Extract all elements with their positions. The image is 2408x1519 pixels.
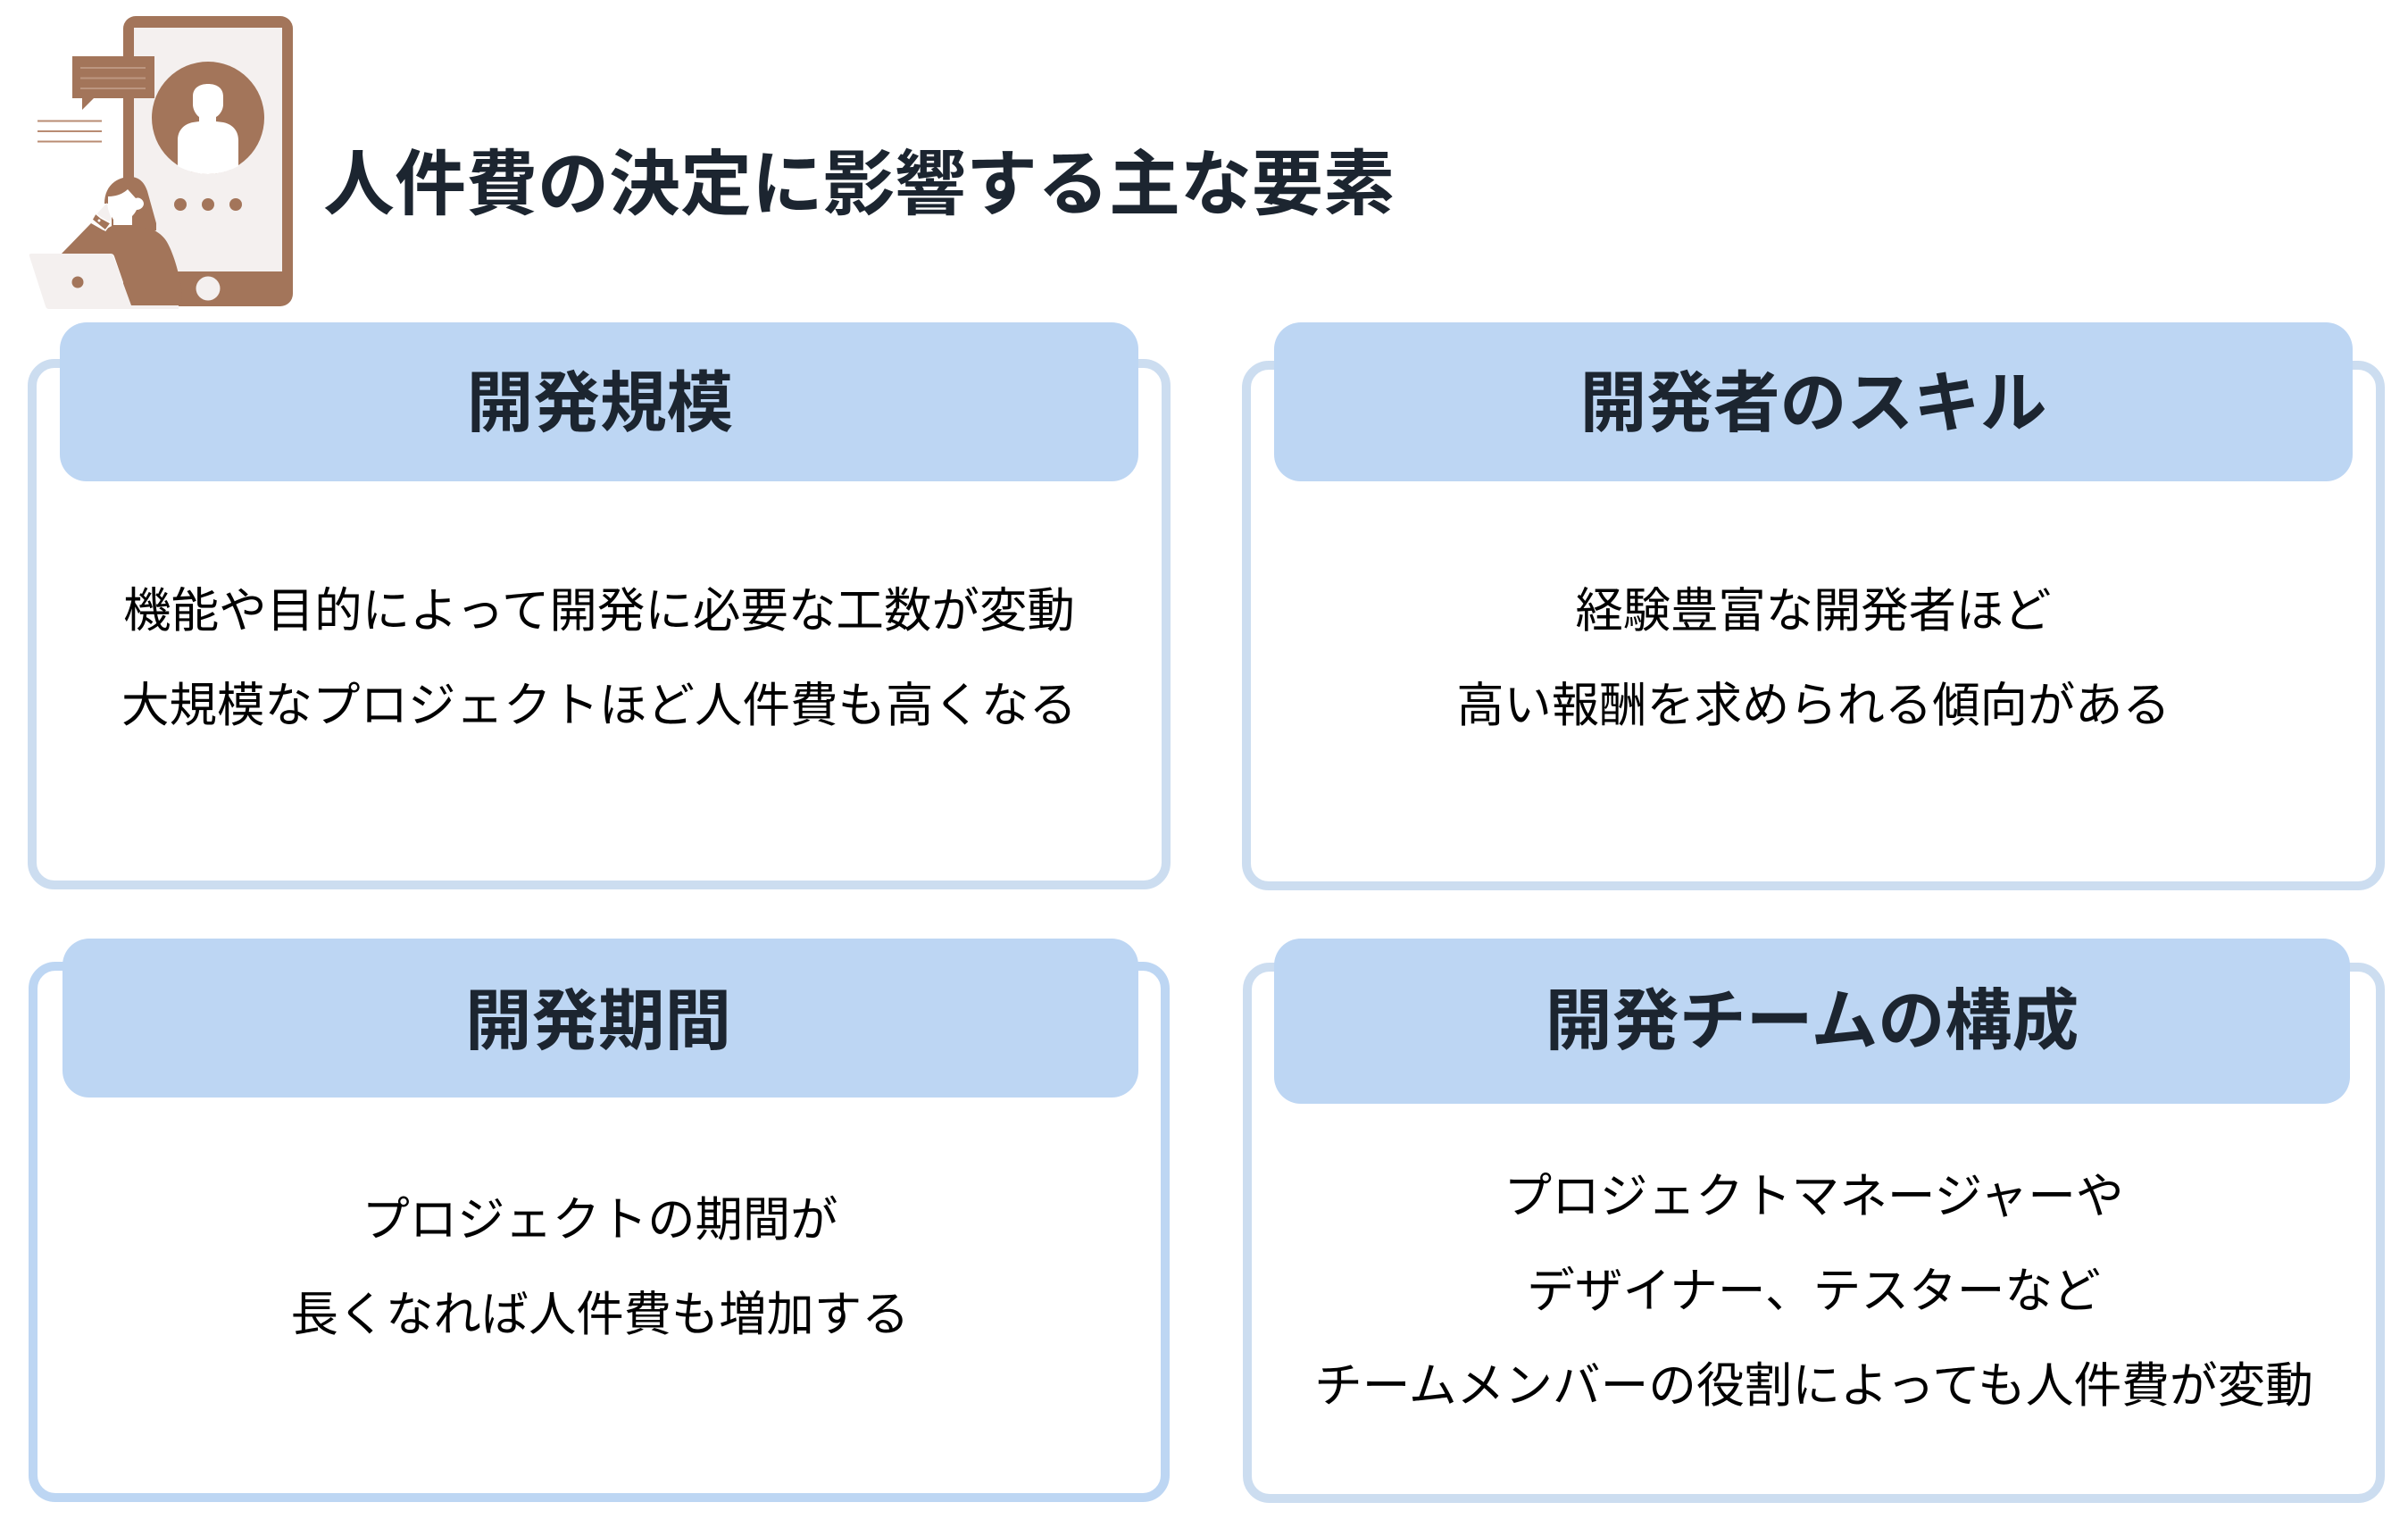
illustration: woman on phone with smartphone profile xyxy=(29,16,293,309)
icon: laptop xyxy=(29,254,179,309)
heading: 開発規模 xyxy=(467,365,733,440)
body text xyxy=(1314,1170,2313,1413)
body text xyxy=(291,1194,909,1341)
body text: チームメンバーの役割によっても人件費が変動 xyxy=(1314,1359,2313,1413)
body text xyxy=(121,585,1077,732)
body text: 機能や目的によって開発に必要な工数が変動 xyxy=(123,585,1075,638)
icon: brown speech bubble xyxy=(72,56,154,110)
body text: プロジェクトマネージャーや xyxy=(1504,1170,2124,1223)
body text: 高い報酬を求められる傾向がある xyxy=(1456,680,2171,732)
panel: 開発規模 xyxy=(28,322,1171,889)
body text: デザイナー、テスターなど xyxy=(1527,1264,2101,1318)
panel frame xyxy=(1243,963,2385,1503)
panel frame xyxy=(28,359,1171,889)
heading: 開発期間 xyxy=(465,984,731,1058)
heading xyxy=(60,322,1138,481)
icon: profile avatar xyxy=(152,62,264,174)
panel: 開発者のスキル xyxy=(1242,322,2385,890)
icon: white speech bubble lines xyxy=(37,121,102,141)
heading xyxy=(1274,939,2350,1104)
panel: 開発期間 xyxy=(29,939,1170,1502)
title: 人件費の決定に影響する主な要素 xyxy=(323,145,1395,224)
icon: three dots xyxy=(174,198,242,211)
heading xyxy=(62,939,1138,1098)
icon: woman xyxy=(62,177,182,305)
body text: プロジェクトの期間が xyxy=(362,1194,837,1247)
body text: 経験豊富な開発者ほど xyxy=(1576,585,2051,638)
panel frame xyxy=(1242,361,2385,890)
heading xyxy=(1274,322,2353,481)
heading: 開発者のスキル xyxy=(1580,365,2046,440)
body text: 大規模なプロジェクトほど人件費も高くなる xyxy=(121,680,1077,732)
heading: 開発チームの構成 xyxy=(1546,983,2079,1058)
body text xyxy=(1456,585,2171,732)
panel: 開発チームの構成 xyxy=(1243,939,2385,1503)
body text: 長くなれば人件費も増加する xyxy=(291,1289,909,1341)
panel frame xyxy=(29,962,1170,1502)
icon: smartphone xyxy=(123,16,293,306)
